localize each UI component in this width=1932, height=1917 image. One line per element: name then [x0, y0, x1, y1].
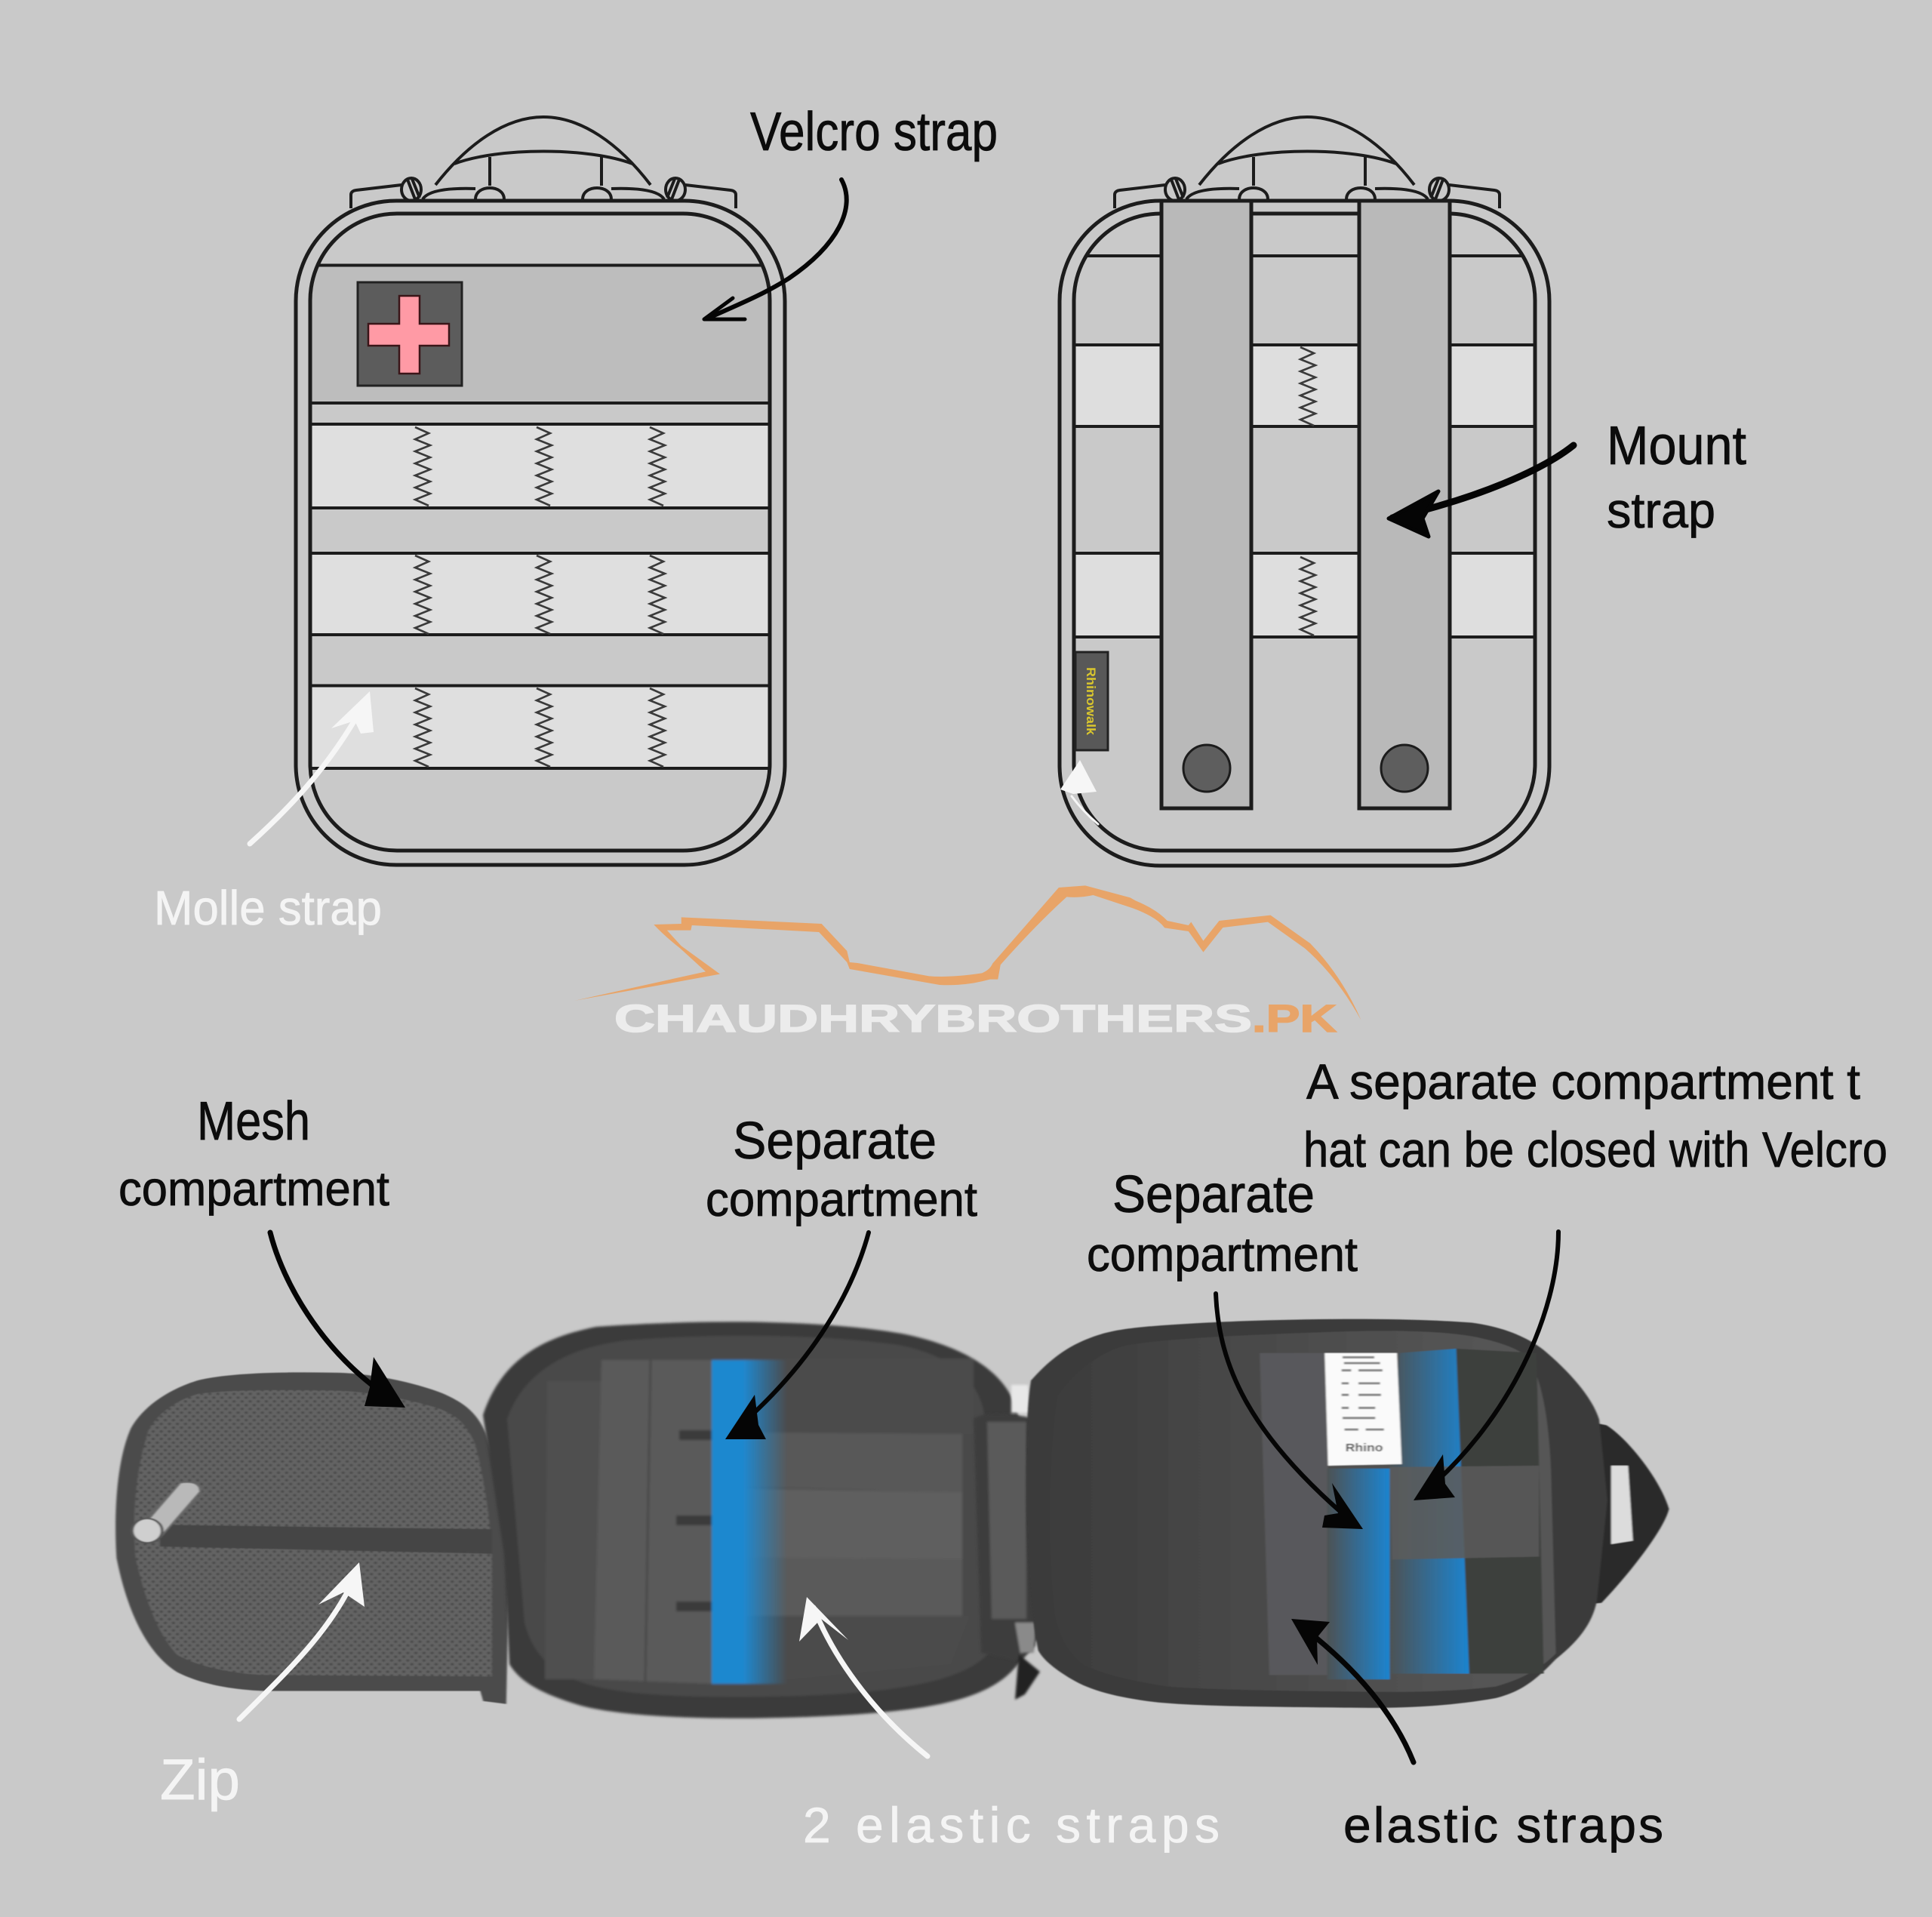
case lining [1050, 1331, 1556, 1692]
upper lining [743, 1359, 974, 1434]
mount strap left [1161, 201, 1251, 808]
arrow: Separate compartment right [1216, 1294, 1363, 1529]
logo wordmark: CHAUDHRYBROTHERS [614, 997, 1252, 1040]
arrow: Molle strap [250, 691, 374, 844]
label: Molle strap: Molle strap [154, 881, 382, 935]
pouch back body [1060, 201, 1549, 866]
pouch front webbing bands [302, 265, 777, 768]
pouch back webbing bands [1068, 256, 1543, 637]
flap zipper [160, 1525, 492, 1554]
arrow: 2 elastic straps [799, 1597, 928, 1756]
photo: mesh flap [115, 1372, 509, 1704]
blue compartment lower [1327, 1469, 1389, 1679]
arrow: Mesh compartment [270, 1232, 405, 1408]
flap outline [115, 1372, 509, 1704]
stitching [1300, 347, 1315, 635]
label: Separate compartment (right): compartment [1087, 1227, 1358, 1282]
arrow: Zip [239, 1562, 365, 1719]
white care label: Rhino [1346, 1442, 1383, 1454]
arrow: Separate compartment middle [725, 1232, 869, 1439]
label: separate compartment closed with Velcro: hat can be closed with Velcro [1303, 1122, 1887, 1177]
logo: Chaudhrybrothers.pk [574, 885, 1361, 1040]
mount strap right [1359, 201, 1450, 808]
label: Separate compartment (right): Separate [1112, 1165, 1315, 1223]
label: Mesh compartment [118, 1091, 389, 1216]
photo: right case compartment [1026, 1319, 1669, 1708]
label: separate compartment closed with Velcro [1303, 1054, 1887, 1177]
label: Separate compartment (middle): compartment [706, 1172, 977, 1226]
label: Separate compartment (middle): Separate [733, 1111, 937, 1170]
label: Separate compartment (right) [1087, 1165, 1358, 1282]
blue compartment upper [1389, 1349, 1469, 1674]
case lining [507, 1336, 989, 1697]
arrow: Mount strap [1389, 445, 1574, 537]
elastic strap [1389, 1466, 1539, 1559]
white care label [1324, 1353, 1401, 1466]
carry handle [1587, 1423, 1669, 1605]
side panel [545, 1381, 601, 1679]
left sleeve [594, 1360, 712, 1684]
photo: hinge zipper [974, 1385, 1040, 1700]
stitching [415, 427, 665, 767]
case shell [483, 1322, 1035, 1719]
label: Mesh compartment: Mesh [197, 1091, 310, 1152]
case shell [1026, 1319, 1607, 1708]
logo motorcycle silhouette [574, 885, 1361, 1020]
elastic strap lower [743, 1558, 962, 1616]
pouch front handle [351, 117, 736, 208]
pouch back inner outline [1074, 214, 1535, 851]
photo: middle case compartment [483, 1322, 1035, 1719]
lining behind straps [743, 1488, 962, 1559]
dark right panel [1456, 1349, 1544, 1674]
brand tag [1075, 652, 1108, 750]
lower lining [743, 1616, 970, 1684]
zip pull [132, 1482, 200, 1543]
arrow: Velcro strap [704, 180, 847, 319]
pouch back handle [1115, 117, 1500, 208]
blue separate compartment [712, 1360, 787, 1684]
panel: pouch back illustration [1060, 117, 1549, 866]
elastic strap upper [743, 1432, 962, 1492]
arrow: compartment closed with Velcro [1414, 1232, 1558, 1500]
label: separate compartment closed with Velcro: A separate compartment t [1306, 1054, 1860, 1109]
label: Separate compartment (middle) [706, 1111, 977, 1226]
arrow: elastic straps [1291, 1619, 1414, 1762]
icon: first aid cross patch [358, 282, 462, 386]
pouch front body [296, 201, 785, 865]
label: Mesh compartment: compartment [118, 1162, 389, 1216]
label: Mount strap: Mount [1607, 416, 1746, 476]
arrow: brand tag [1060, 760, 1098, 824]
mesh panel [134, 1390, 492, 1676]
label: elastic straps: elastic straps [1343, 1797, 1663, 1853]
label: Mount strap: strap [1607, 482, 1715, 538]
panel: pouch front illustration [296, 117, 785, 865]
brand tag: Rhinowalk [1084, 667, 1098, 736]
label: Mount strap [1607, 416, 1746, 538]
pouch front inner outline [310, 214, 770, 851]
label: 2 elastic straps: 2 elastic straps [803, 1797, 1220, 1853]
logo domain suffix: .PK [1252, 997, 1337, 1040]
grey strap panel [1260, 1353, 1328, 1675]
label: Zip: Zip [160, 1748, 240, 1812]
label: Velcro strap: Velcro strap [750, 102, 998, 162]
